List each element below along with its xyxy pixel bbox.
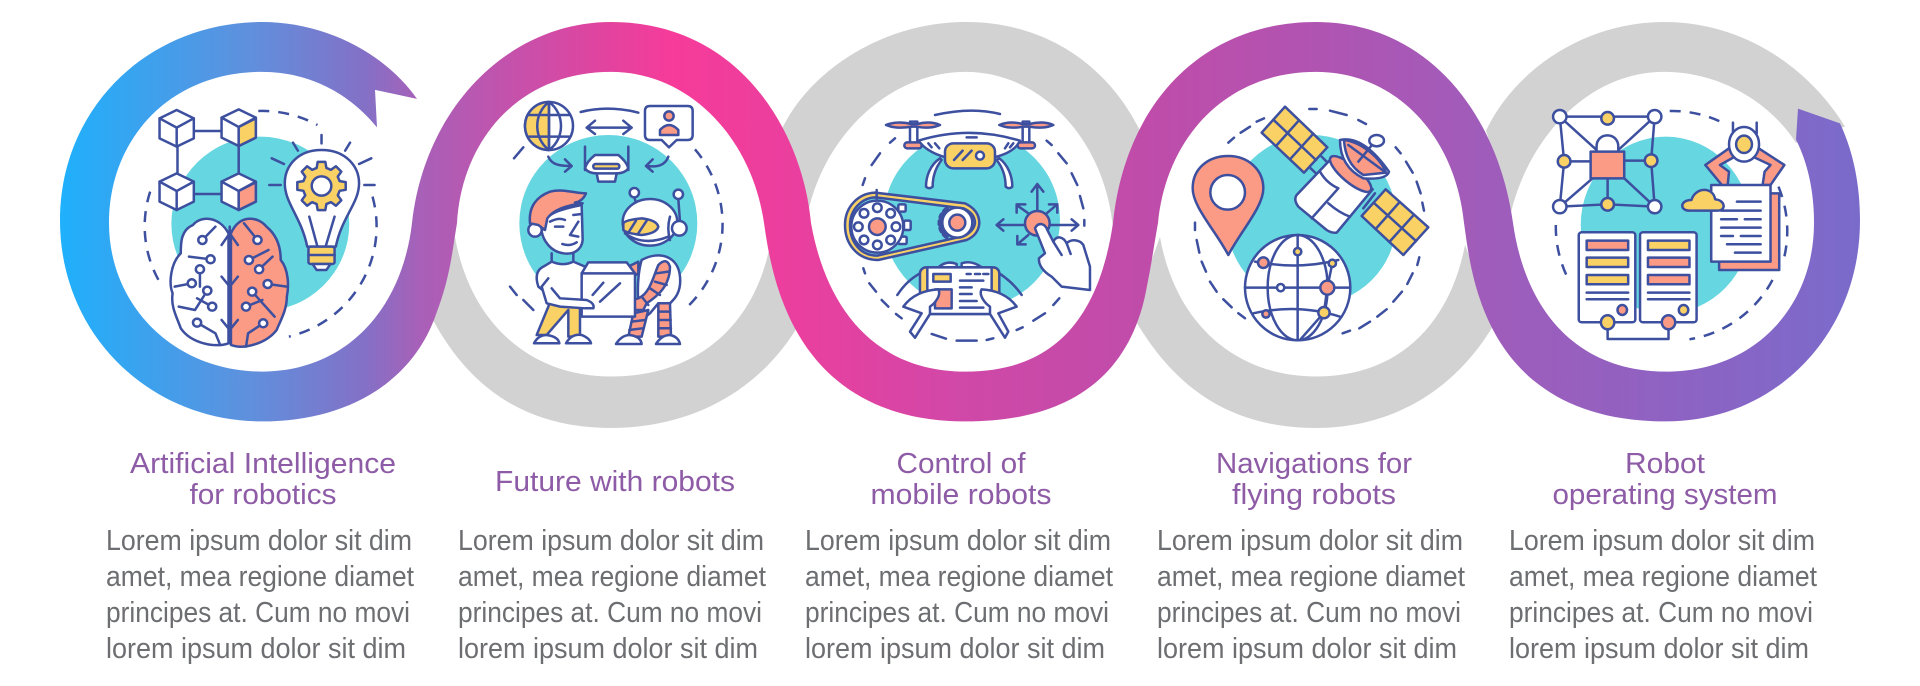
belt drive <box>845 190 979 260</box>
text column: Robot operating system <box>1509 448 1817 665</box>
text column: Artificial Intelligence for robotics: Artificial Intelligence <box>130 448 396 480</box>
icon: future with robots (man and robot) <box>510 102 723 344</box>
text column: Navigations for flying robots: Navigations for <box>1216 448 1412 480</box>
text column: Future with robots: amet, mea regione diamet <box>458 561 766 593</box>
text column: Navigations for flying robots: Lorem ipsum dolor sit dim <box>1157 525 1463 557</box>
icon: AI for robotics (blocks, bulb, brain) <box>145 109 377 347</box>
text column: Future with robots: principes at. Cum no movi <box>458 597 762 629</box>
text column: Navigations for flying robots: principes at. Cum no movi <box>1157 597 1461 629</box>
text column: Artificial Intelligence for robotics: lorem ipsum dolor sit dim <box>106 633 406 665</box>
text column: Future with robots: lorem ipsum dolor sit dim <box>458 633 758 665</box>
text column: Artificial Intelligence for robotics: amet, mea regione diamet <box>106 561 414 593</box>
text column: Navigations for flying robots: lorem ipsum dolor sit dim <box>1157 633 1457 665</box>
text column: Control of mobile robots: principes at. Cum no movi <box>805 597 1109 629</box>
text column: Control of mobile robots: amet, mea regione diamet <box>805 561 1113 593</box>
grey background rings <box>430 22 1845 428</box>
text column: Future with robots <box>458 466 766 665</box>
text column: Future with robots: Lorem ipsum dolor sit dim <box>458 525 764 557</box>
robot figure <box>616 188 687 344</box>
text column: Navigations for flying robots: amet, mea regione diamet <box>1157 561 1465 593</box>
tablet in hands <box>897 262 1022 338</box>
man figure <box>528 191 635 343</box>
text column: Navigations for flying robots <box>1157 448 1465 665</box>
text column: Future with robots: Future with robots <box>495 466 735 498</box>
text column: Robot operating system: amet, mea regione diamet <box>1509 561 1817 593</box>
text column: Robot operating system: lorem ipsum dolor sit dim <box>1509 633 1809 665</box>
touch gesture <box>997 184 1090 290</box>
text column: Navigations for flying robots: flying robots <box>1232 479 1396 511</box>
gradient ribbon with arrow ends <box>60 22 1860 421</box>
text column: Control of mobile robots: Lorem ipsum dolor sit dim <box>805 525 1111 557</box>
text column: Robot operating system: operating system <box>1552 479 1778 511</box>
icon: navigation for flying robots (pin, satellite, globe) <box>1193 107 1428 340</box>
drone <box>886 122 1053 188</box>
text column: Robot operating system: Robot <box>1625 448 1705 480</box>
icon: robot operating system (lock network, servers, arm, documents) <box>1553 110 1787 339</box>
text column: Artificial Intelligence for robotics: principes at. Cum no movi <box>106 597 410 629</box>
text column: Artificial Intelligence for robotics: Lorem ipsum dolor sit dim <box>106 525 412 557</box>
text column: Control of mobile robots: Control of <box>896 448 1026 480</box>
text column: Control of mobile robots: mobile robots <box>870 479 1052 511</box>
text column: Artificial Intelligence for robotics <box>106 448 414 665</box>
text column: Robot operating system: Lorem ipsum dolor sit dim <box>1509 525 1815 557</box>
text column: Control of mobile robots: lorem ipsum dolor sit dim <box>805 633 1105 665</box>
text column: Robot operating system: principes at. Cum no movi <box>1509 597 1813 629</box>
text column: Artificial Intelligence for robotics: for robotics <box>190 479 336 511</box>
text column: Control of mobile robots <box>805 448 1113 665</box>
icon: control of mobile robots (drone, belt, touch, tablet) <box>845 111 1090 341</box>
